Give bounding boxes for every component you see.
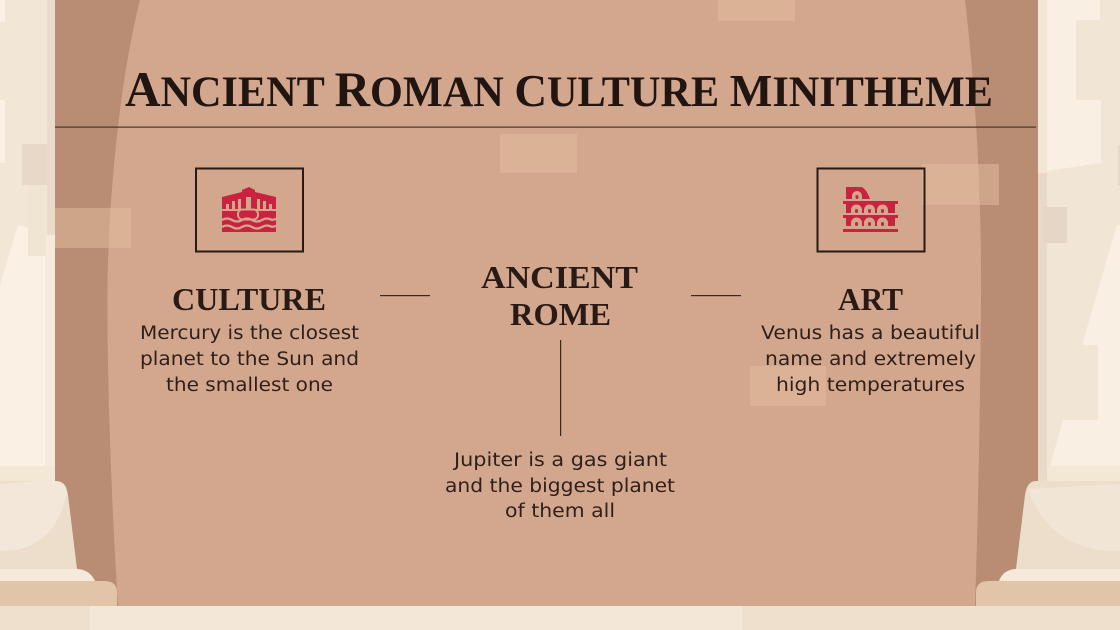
right column bbox=[1038, 0, 1120, 482]
text: culture description bbox=[140, 323, 359, 396]
text: art description: Venus has a beautiful bbox=[761, 323, 980, 344]
text: jupiter description: of them all bbox=[505, 501, 615, 522]
floor bbox=[0, 606, 1120, 630]
text: jupiter description: and the biggest planet bbox=[445, 476, 675, 497]
right curtain bbox=[965, 0, 1038, 606]
connector: center to art bbox=[691, 295, 741, 296]
heading: ancient rome: ANCIENT bbox=[481, 259, 638, 295]
text: art description: high temperatures bbox=[776, 375, 965, 396]
text: jupiter description: Jupiter is a gas giant bbox=[453, 450, 667, 471]
heading: culture: CULTURE bbox=[172, 281, 326, 317]
heading: ancient rome: ROME bbox=[510, 296, 611, 332]
heading: art: ART bbox=[838, 281, 903, 317]
faint wall blocks bbox=[55, 0, 999, 406]
title divider bbox=[55, 126, 1036, 128]
connector: center to jupiter text bbox=[560, 340, 561, 436]
text: culture description: Mercury is the closest bbox=[140, 323, 359, 344]
left column bbox=[0, 0, 55, 482]
panel: culture bbox=[140, 168, 359, 396]
icon: bridge bbox=[196, 168, 303, 252]
left column base bbox=[0, 481, 117, 606]
text: culture description: the smallest one bbox=[166, 375, 333, 396]
text: culture description: planet to the Sun and bbox=[140, 349, 359, 370]
heading: ancient rome bbox=[481, 259, 638, 332]
text: jupiter description bbox=[445, 450, 675, 522]
panel: art bbox=[761, 168, 980, 396]
text: art description: name and extremely bbox=[765, 349, 976, 370]
left curtain bbox=[55, 0, 140, 606]
right column base bbox=[976, 481, 1120, 606]
connector: culture to center bbox=[380, 295, 430, 296]
text: art description bbox=[761, 323, 980, 396]
title: ANCIENT ROMAN CULTURE MINITHEME bbox=[125, 61, 993, 117]
icon: colosseum bbox=[818, 168, 924, 252]
